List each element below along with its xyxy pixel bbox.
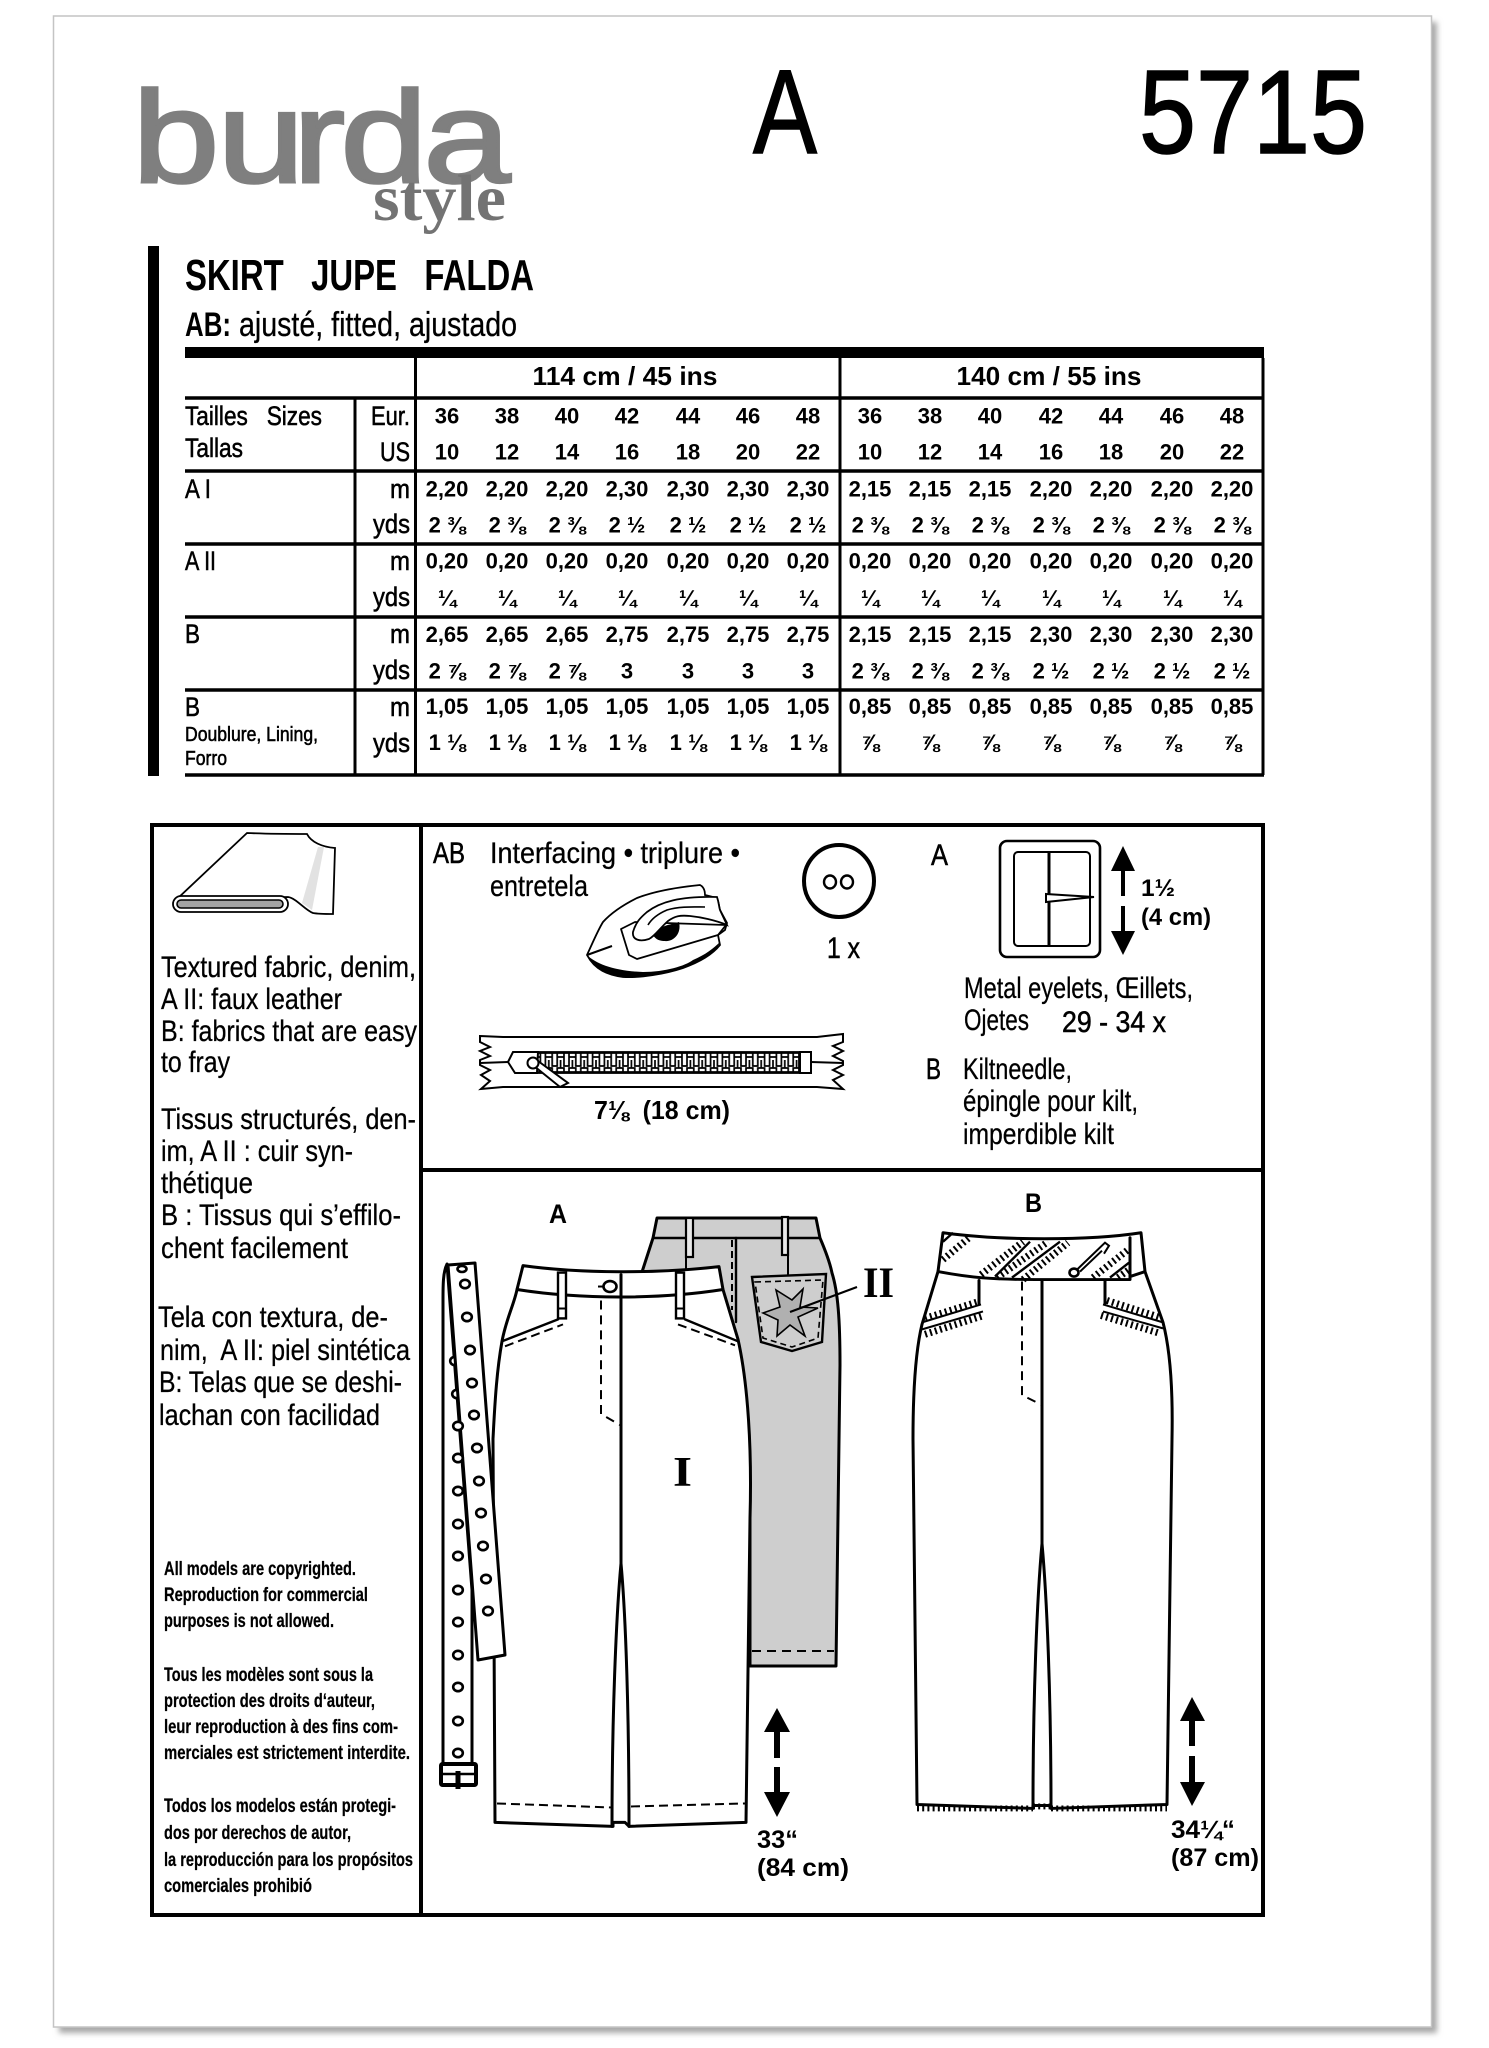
table values: 2 ½: [1093, 658, 1129, 684]
table values: ¼: [981, 586, 1001, 610]
view B label: B: [1025, 1188, 1042, 1218]
table values: 1 ⅛: [489, 730, 527, 755]
table values: 2,30: [667, 476, 709, 502]
width headers: 114 cm / 45 ins: [532, 361, 718, 391]
row labels: yds: [373, 582, 410, 612]
table values: 14: [555, 440, 580, 464]
table values: ¼: [799, 586, 819, 610]
table values: 2,75: [606, 622, 648, 647]
table values: 0,20: [1151, 548, 1193, 574]
text: zipper length: 7⅛ (18 cm): [594, 1095, 730, 1125]
table values: ¼: [679, 586, 699, 610]
width headers: 140 cm / 55 ins: [956, 361, 1142, 391]
table values: 2 ⅜: [549, 512, 587, 538]
table values: 2,65: [426, 622, 468, 647]
table values: 2 ⅞: [489, 658, 527, 684]
text: kilt needle: imperdible kilt: [963, 1118, 1115, 1151]
text: buckle size: [1141, 875, 1211, 931]
table values: 0,85: [909, 694, 951, 719]
table values: 2,30: [727, 476, 769, 502]
skirt B front view: [913, 1233, 1172, 1808]
table values: ¼: [861, 586, 881, 610]
table values: 0,85: [1090, 694, 1132, 719]
text: copyright notice: dos por derechos de autor,: [164, 1823, 351, 1844]
table values: 3: [621, 658, 633, 684]
table values: 40: [555, 404, 579, 428]
view A label: A: [549, 1199, 567, 1229]
arrow: length A: [764, 1708, 790, 1817]
subtitle: fitted: AB:: [185, 306, 231, 344]
text: French fabrics: B : Tissus qui s’effilo-: [161, 1199, 401, 1232]
text: English fabrics: B: fabrics that are easy: [161, 1015, 417, 1048]
belt eyelets: [453, 1266, 493, 1757]
text: copyright notice: Tous les modèles sont sous la: [164, 1665, 373, 1686]
table values: 0,20: [849, 548, 891, 574]
text: copyright notice: Reproduction for commercial: [164, 1585, 368, 1606]
table values: 1 ⅛: [790, 730, 828, 755]
table values: 0,85: [849, 694, 891, 719]
text: eyelets: Metal eyelets, Œillets,: [964, 972, 1193, 1005]
text: kilt needle: B: [926, 1053, 941, 1086]
text: French fabrics: Tissus structurés, den-: [161, 1103, 416, 1136]
table values: 2,75: [787, 622, 829, 647]
table values: 0,20: [727, 548, 769, 574]
table values: 1,05: [606, 694, 648, 719]
panel: fabric suggestions: [158, 833, 417, 1897]
table values: 3: [802, 658, 814, 684]
frayed waistband stripes: [943, 1233, 1129, 1280]
width headers: [532, 361, 1142, 391]
text: copyright notice: comerciales prohibió: [164, 1876, 312, 1897]
table values: 1 ⅛: [670, 730, 708, 755]
text: kilt needle: Kiltneedle,: [963, 1053, 1072, 1086]
title: skirt jupe falda: SKIRT JUPE FALDA: [185, 251, 534, 300]
text: eyelets: Ojetes: [964, 1004, 1029, 1037]
table values: 2,20: [546, 476, 588, 502]
table values: 16: [1039, 440, 1063, 464]
text: interfacing: AB: [433, 837, 465, 870]
table values: 2 ⅞: [429, 658, 467, 684]
table values: 1,05: [546, 694, 588, 719]
text: French fabrics: [161, 1103, 416, 1265]
row labels: m: [390, 619, 410, 649]
text: Spanish fabrics: [158, 1301, 410, 1432]
skirt A front view: [493, 1266, 750, 1826]
back pocket with star: [752, 1274, 826, 1351]
row labels: Doublure, Lining,: [185, 724, 318, 746]
table values: 2,65: [546, 622, 588, 647]
subtitle: fitted: ajusté, fitted, ajustado: [239, 306, 517, 344]
text: copyright notice: Todos los modelos están protegi-: [164, 1796, 396, 1817]
table values: ⅞: [1102, 730, 1122, 755]
table values: 2,20: [1211, 476, 1253, 502]
table values: 0,20: [426, 548, 468, 574]
table values: 1,05: [486, 694, 528, 719]
text: Spanish fabrics: lachan con facilidad: [159, 1399, 380, 1432]
row labels: Tailles Sizes: [185, 401, 322, 431]
table values: 2 ⅜: [1033, 512, 1071, 538]
text: copyright notice: merciales est strictement interdite.: [164, 1743, 410, 1764]
table values: 2 ⅜: [489, 512, 527, 538]
table values: 2 ⅜: [972, 512, 1010, 538]
text: copyright notice: [164, 1559, 413, 1897]
text: length B: (87 cm): [1171, 1844, 1259, 1872]
table values: ¼: [1102, 586, 1122, 610]
table values: 0,20: [969, 548, 1011, 574]
table values: 2,20: [486, 476, 528, 502]
left accent bar: [148, 246, 159, 776]
text: length B: [1171, 1816, 1259, 1872]
table values: 2,30: [1030, 622, 1072, 647]
row labels: yds: [373, 728, 410, 758]
text: copyright notice: leur reproduction à des fins com-: [164, 1717, 398, 1738]
row labels: B: [185, 692, 200, 722]
table values: 42: [1039, 404, 1063, 428]
row labels: Forro: [185, 748, 227, 770]
table values: ⅞: [1223, 730, 1243, 755]
table values: 22: [1220, 440, 1244, 464]
row labels: A I: [185, 474, 211, 504]
table values: 16: [615, 440, 639, 464]
table values: ¼: [739, 586, 759, 610]
table values: 2 ⅜: [429, 512, 467, 538]
text: copyright notice: la reproducción para los propósitos: [164, 1850, 413, 1871]
table values: 2 ⅜: [972, 658, 1010, 684]
table values: [426, 404, 1253, 755]
table values: 2 ½: [609, 512, 645, 538]
panel: skirt drawings: [441, 1188, 1259, 1882]
row labels: m: [390, 546, 410, 576]
table values: 0,20: [546, 548, 588, 574]
table values: 0,20: [1090, 548, 1132, 574]
table values: 2,20: [1151, 476, 1193, 502]
table values: 2,15: [909, 622, 951, 647]
text: view A: A: [931, 839, 948, 872]
table values: 36: [435, 404, 459, 428]
table values: 10: [435, 440, 459, 464]
table values: ¼: [438, 586, 458, 610]
table values: 3: [682, 658, 694, 684]
text: copyright notice: All models are copyrighted.: [164, 1559, 356, 1580]
text: kilt needle: épingle pour kilt,: [963, 1085, 1138, 1118]
table values: 0,20: [486, 548, 528, 574]
table values: 2,20: [1030, 476, 1072, 502]
table values: 2 ½: [1154, 658, 1190, 684]
table values: 10: [858, 440, 882, 464]
text: buckle size: (4 cm): [1141, 904, 1211, 931]
table values: ⅞: [921, 730, 941, 755]
text: English fabrics: A II: faux leather: [161, 983, 342, 1016]
text: interfacing: entretela: [490, 870, 588, 903]
table values: 2,15: [849, 476, 891, 502]
table values: 44: [1099, 404, 1124, 428]
text: Spanish fabrics: Tela con textura, de-: [158, 1301, 388, 1334]
table values: ¼: [558, 586, 578, 610]
text: kilt needle: [926, 1053, 1138, 1151]
table values: 42: [615, 404, 639, 428]
table values: 2 ⅜: [1154, 512, 1192, 538]
table values: 3: [742, 658, 754, 684]
text: French fabrics: im, A II : cuir syn-: [161, 1135, 353, 1168]
text: length B: 34¼“: [1171, 1816, 1235, 1844]
table values: 2,30: [606, 476, 648, 502]
skirt A back view: [642, 1217, 857, 1666]
row labels: yds: [373, 509, 410, 539]
lower frame: [152, 825, 1263, 1915]
table values: 1,05: [667, 694, 709, 719]
roman numeral I: I: [673, 1450, 692, 1496]
logo: burda style: burda: [132, 65, 511, 210]
text: English fabrics: [161, 951, 417, 1079]
table values: 18: [1099, 440, 1123, 464]
belt buckle small: [441, 1764, 476, 1789]
table values: 2,30: [1211, 622, 1253, 647]
text: Spanish fabrics: nim, A II: piel sintética: [160, 1334, 410, 1367]
table values: 2,75: [667, 622, 709, 647]
row labels: Tallas: [185, 433, 243, 463]
table values: ⅞: [1042, 730, 1062, 755]
table values: 0,20: [787, 548, 829, 574]
table values: 2,20: [1090, 476, 1132, 502]
table values: 0,85: [969, 694, 1011, 719]
table values: 48: [796, 404, 820, 428]
table values: 46: [736, 404, 760, 428]
table values: 20: [1160, 440, 1184, 464]
table values: 44: [676, 404, 701, 428]
table values: 2,30: [787, 476, 829, 502]
text: eyelets: 29 - 34 x: [1062, 1006, 1166, 1039]
table values: 1,05: [727, 694, 769, 719]
table values: 12: [495, 440, 519, 464]
table values: 1,05: [426, 694, 468, 719]
table values: 2,15: [969, 476, 1011, 502]
text: copyright notice: purposes is not allowed.: [164, 1611, 334, 1632]
table values: ¼: [1042, 586, 1062, 610]
belt: [441, 1263, 505, 1789]
table values: 0,85: [1151, 694, 1193, 719]
table values: 2 ⅜: [852, 658, 890, 684]
row labels: B: [185, 619, 200, 649]
row labels: m: [390, 692, 410, 722]
table values: 1 ⅛: [549, 730, 587, 755]
table values: 2 ½: [730, 512, 766, 538]
button quantity: 1 x: [827, 932, 860, 965]
text: French fabrics: chent facilement: [161, 1232, 349, 1265]
frayed pockets: [922, 1281, 1163, 1334]
row labels: m: [390, 474, 410, 504]
row labels: A II: [185, 546, 216, 576]
table values: 0,85: [1211, 694, 1253, 719]
table values: ⅞: [861, 730, 881, 755]
table values: 18: [676, 440, 700, 464]
table values: 1 ⅛: [609, 730, 647, 755]
table values: 2 ⅜: [912, 512, 950, 538]
table values: ¼: [1223, 586, 1243, 610]
table values: 2 ½: [1033, 658, 1069, 684]
table values: 2 ½: [1214, 658, 1250, 684]
frayed hem: [917, 1806, 1167, 1808]
view letter A: A: [753, 45, 817, 179]
pattern number: 5715: [1139, 46, 1367, 179]
table values: 0,20: [1211, 548, 1253, 574]
table values: 2,20: [426, 476, 468, 502]
row labels: [185, 401, 410, 770]
table values: 40: [978, 404, 1002, 428]
icon: belt buckle: [1000, 841, 1100, 957]
safety pin: [1070, 1243, 1109, 1277]
text: copyright notice: protection des droits d‘auteur,: [164, 1691, 375, 1712]
panel: notions: [433, 837, 1211, 1151]
table values: 2,75: [727, 622, 769, 647]
table values: 36: [858, 404, 882, 428]
table values: ⅞: [1163, 730, 1183, 755]
logo: burda style: style: [373, 162, 506, 235]
table values: 0,20: [909, 548, 951, 574]
table values: 2 ⅞: [549, 658, 587, 684]
text: English fabrics: Textured fabric, denim,: [161, 951, 416, 984]
text: buckle size: 1½: [1141, 875, 1175, 902]
table values: 2 ⅜: [1214, 512, 1252, 538]
table values: ¼: [498, 586, 518, 610]
table values: 20: [736, 440, 760, 464]
table values: ¼: [921, 586, 941, 610]
text: French fabrics: thétique: [161, 1167, 253, 1200]
icon: iron: [587, 885, 727, 977]
table values: 0,85: [1030, 694, 1072, 719]
text: length A: [757, 1826, 849, 1882]
icon: button: [804, 845, 874, 917]
row labels: Eur.: [371, 401, 410, 431]
text: length A: 33“: [757, 1826, 798, 1854]
text: length A: (84 cm): [757, 1854, 849, 1882]
table values: 2 ⅜: [1093, 512, 1131, 538]
table values: 2 ½: [670, 512, 706, 538]
table values: 2,30: [1151, 622, 1193, 647]
table values: 14: [978, 440, 1003, 464]
table values: 2 ⅜: [852, 512, 890, 538]
icon: zipper: [480, 1034, 843, 1089]
leader line to II: [790, 1287, 857, 1312]
icon: fabric roll: [173, 833, 335, 914]
arrow: length B: [1180, 1697, 1205, 1806]
row labels: US: [380, 437, 410, 467]
table values: 0,20: [606, 548, 648, 574]
text: eyelets: [964, 972, 1193, 1039]
fabric requirements table: [185, 347, 1264, 775]
table values: 38: [495, 404, 519, 428]
text: Spanish fabrics: B: Telas que se deshi-: [159, 1366, 402, 1399]
table rules: [185, 347, 1264, 775]
text: interfacing: Interfacing • triplure •: [490, 837, 740, 870]
table values: 22: [796, 440, 820, 464]
table values: 12: [918, 440, 942, 464]
text: interfacing: [433, 837, 740, 903]
table values: ¼: [1163, 586, 1183, 610]
table values: 38: [918, 404, 942, 428]
table values: 1 ⅛: [730, 730, 768, 755]
table values: 2,65: [486, 622, 528, 647]
table values: 0,20: [1030, 548, 1072, 574]
table values: 2,30: [1090, 622, 1132, 647]
table values: ¼: [618, 586, 638, 610]
table values: 1 ⅛: [429, 730, 467, 755]
arrow: buckle height: [1111, 846, 1135, 955]
text: English fabrics: to fray: [161, 1046, 230, 1079]
table values: ⅞: [981, 730, 1001, 755]
roman numeral II: II: [863, 1260, 894, 1307]
row labels: yds: [373, 655, 410, 685]
table values: 2,15: [909, 476, 951, 502]
table values: 1,05: [787, 694, 829, 719]
table values: 0,20: [667, 548, 709, 574]
table values: 2 ½: [790, 512, 826, 538]
table values: 2,15: [849, 622, 891, 647]
table values: 2,15: [969, 622, 1011, 647]
table values: 46: [1160, 404, 1184, 428]
table values: 48: [1220, 404, 1244, 428]
table values: 2 ⅜: [912, 658, 950, 684]
